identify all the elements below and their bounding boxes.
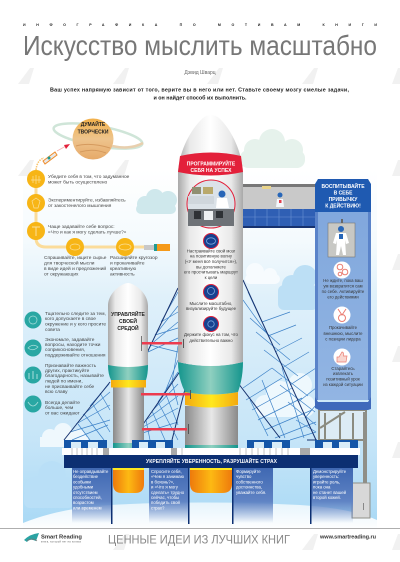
text: lesson	[323, 366, 363, 387]
red band: СЕБЯ НА УСПЕХ	[190, 168, 232, 174]
environment item 2: Экономьте, задавайте	[45, 336, 95, 343]
environment item 3: людей по имени,	[45, 378, 83, 384]
column 2: в боязнь?»,	[151, 480, 174, 484]
top caption: ИНФОГРАФИКА ПО МОТИВАМ КНИГИ	[23, 23, 377, 27]
yellow band	[185, 392, 238, 408]
heading: ПРИВЫЧКУ	[329, 197, 358, 203]
clouds	[24, 129, 318, 508]
step 5	[110, 238, 158, 278]
tower legs	[319, 410, 370, 518]
column 3: Формируйте	[236, 469, 261, 474]
step 4: Спрашивайте, ищите сырье	[44, 254, 107, 261]
environment item 3: других, практикуйте	[45, 367, 90, 374]
text: act: его действиями	[327, 294, 359, 300]
text: leader	[323, 325, 363, 342]
column 3: достоинства,	[236, 484, 262, 490]
column 4: уверенность:	[313, 474, 339, 479]
text: positive mind: к цели	[205, 275, 218, 280]
text: lesson: из каждой ситуации	[323, 382, 363, 387]
heading: СРЕДОЙ	[117, 324, 139, 332]
icon: head	[204, 284, 218, 300]
column 4: второй кожей.	[313, 495, 341, 500]
step 3: Чаще задавайте себе вопрос:	[48, 223, 115, 230]
column 1: особыми	[73, 480, 91, 484]
heading: УПРАВЛЯЙТЕ	[111, 310, 146, 318]
heading	[78, 120, 109, 136]
column 3: уважайте себя.	[236, 490, 266, 495]
environment item 2: соприкосновения,	[45, 348, 85, 353]
environment item 1: окружение и у кого просите	[45, 322, 106, 328]
nozzles	[113, 468, 232, 493]
red support arms	[141, 336, 191, 434]
icon: thumbs up	[334, 348, 350, 366]
text: positive mind: его просчитывать маршрут	[184, 270, 238, 274]
environment item 3: Признавайте важность	[45, 362, 97, 369]
footer url: www.smartreading.ru	[319, 534, 377, 540]
footer line	[0, 527, 400, 530]
step 4: от окружающих	[44, 272, 79, 278]
column 2: сейчас, чтобы	[151, 495, 179, 500]
column 2: страх?	[151, 506, 165, 510]
text: act: Не ждите, пока ваш	[323, 278, 363, 283]
environment item 2: вопросы, находите точки	[45, 343, 101, 348]
text: positive mind: вы дополняете	[196, 264, 227, 270]
step 4: в виде идей и предложений	[44, 265, 106, 272]
column 1: удобными	[73, 484, 94, 490]
environment item 2: поддерживайте отношения	[45, 352, 106, 358]
step 5: и прокачивайте	[110, 260, 145, 266]
environment item 4	[24, 396, 80, 416]
step 1	[27, 170, 130, 188]
environment item 4: от вас ожидают	[45, 412, 80, 416]
text: focus: Держите фокус на том, что	[184, 332, 239, 337]
step 2: от закостенелого мышления	[48, 204, 112, 209]
text: leader: Прокачивайте	[329, 325, 358, 330]
step 5: активность	[110, 272, 135, 278]
environment item 3: всю славу	[45, 390, 68, 395]
environment item 1	[24, 311, 106, 333]
step 2	[27, 194, 126, 212]
text: positive mind: («У меня всё получится»),	[185, 259, 237, 264]
author: Дэвид Шварц	[184, 70, 216, 76]
path: idea track	[36, 180, 146, 247]
heading: ВОСПИТЫВАЙТЕ	[321, 182, 365, 190]
right truss	[238, 280, 317, 440]
environment item 4: больше, чем	[45, 405, 73, 411]
text: leader: с позиции лидера	[325, 336, 361, 342]
column 2: и «Что я могу	[151, 484, 179, 490]
icon: brain	[204, 234, 218, 248]
logo	[24, 533, 82, 544]
text: act: ум возвратится сам	[323, 284, 363, 288]
column 3: собственного	[236, 480, 263, 484]
column 2	[149, 468, 190, 524]
heading: В СЕБЕ	[334, 190, 353, 196]
logo: Smart Reading	[41, 534, 82, 540]
small rocket	[108, 283, 148, 468]
panel: tower habit	[315, 179, 371, 410]
column 4: играйте роль,	[313, 480, 340, 484]
booster horizontal	[144, 244, 170, 251]
column 1: отсутствием	[73, 490, 98, 495]
column 4: не станет вашей	[313, 490, 347, 495]
intro text: и он найдет способ их выполнить.	[153, 94, 247, 102]
yellow band	[111, 380, 146, 388]
intro text	[50, 88, 350, 102]
column 1: способностей,	[73, 495, 102, 500]
environment item 1: Тщательно следите за тем,	[45, 311, 106, 317]
text: act	[322, 278, 365, 300]
environment item 3: благодарность, называйте	[45, 372, 104, 379]
text: focus: действительно важно	[189, 338, 233, 343]
step 1: Убедите себя в том, что задуманное	[48, 174, 130, 180]
text: lesson: позитивный урок	[326, 376, 360, 382]
icon: robot on bridge	[276, 192, 284, 207]
heading: К ДЕЙСТВИЮ!	[325, 202, 361, 210]
footer slogan: ЦЕННЫЕ ИДЕИ ИЗ ЛУЧШИХ КНИГ	[108, 532, 290, 546]
body and nose	[108, 283, 148, 367]
heading: ДУМАЙТЕ	[81, 120, 106, 128]
environment item 4: Всегда делайте	[45, 399, 80, 406]
column 1: или временем	[73, 506, 102, 510]
environment item 3: не присваивайте себе	[45, 383, 95, 390]
column 2: победить свой	[151, 500, 181, 505]
text: act: по себе. Активируйте	[322, 289, 365, 294]
launch platform	[62, 440, 360, 455]
step 2: Экспериментируйте, избавляйтесь	[48, 196, 126, 204]
step 4	[44, 238, 107, 278]
step 5: креативную	[110, 267, 136, 272]
icon: planet	[52, 118, 144, 160]
column 3: чувство	[236, 474, 252, 479]
text: positive mind: на позитивную волну	[190, 254, 233, 258]
snow ground	[23, 502, 377, 530]
step 5: Расширяйте кругозор	[110, 254, 158, 261]
icon: elevator with robot	[328, 219, 355, 257]
column 2: Спросите себя,	[151, 469, 182, 474]
banner	[64, 455, 358, 468]
icon: medal	[334, 306, 350, 324]
step 4: для творческой мысли	[44, 260, 95, 266]
intro text: Ваш успех напрямую зависит от того, верите вы в него или нет. Ставьте своему мозгу смелые задачи,	[50, 88, 350, 94]
text: positive mind: Настраивайте свой мозг	[187, 248, 236, 254]
heading	[111, 310, 146, 332]
column 2: «Чем я занимаю	[151, 474, 185, 479]
logo: книга, которой нет на полках	[41, 540, 82, 544]
column 3	[232, 468, 273, 524]
banner: УКРЕПЛЯЙТЕ УВЕРЕННОСТЬ, РАЗРУШАЙТЕ СТРАХ	[146, 457, 278, 465]
red band	[178, 152, 243, 176]
text: visualize	[186, 301, 237, 311]
icon: gears	[334, 262, 350, 278]
environment item 1: кого допускаете в свое	[45, 317, 96, 322]
column 2: сделать» трудно	[151, 490, 185, 495]
column 4: пока она	[313, 484, 331, 490]
column 1: Не оправдывайте	[73, 469, 109, 474]
red band: ПРОГРАММИРУЙТЕ	[187, 160, 236, 168]
text: leader: внешнюю, мыслите	[323, 331, 363, 336]
text: visualize: визуализируйте будущее	[186, 306, 237, 311]
text: lesson: Старайтесь	[331, 366, 355, 371]
step 1: может быть осуществлено	[48, 180, 108, 186]
column 4	[310, 468, 353, 524]
step 3	[27, 222, 127, 240]
mini rocket and arrow	[36, 144, 70, 170]
lamp	[262, 186, 271, 189]
column 1	[72, 468, 112, 524]
teal section	[178, 362, 243, 394]
background sky	[23, 170, 377, 525]
teal section	[108, 365, 148, 380]
column 1: возрастом	[73, 500, 94, 505]
body and nose	[178, 115, 243, 366]
main rocket	[178, 115, 243, 468]
column 4: Демонстрируйте	[313, 469, 347, 474]
heading	[321, 182, 365, 210]
bridge	[243, 184, 316, 228]
environment item 1: совета	[45, 328, 60, 333]
heading: ТВОРЧЕСКИ	[78, 130, 109, 136]
left truss	[64, 382, 110, 440]
lower stage	[185, 406, 238, 445]
text: focus	[184, 332, 239, 343]
step 3: «Что и как я могу сделать лучше?»	[48, 230, 127, 236]
heading: СВОЕЙ	[119, 317, 137, 325]
centre-left truss	[132, 288, 195, 440]
environment item 2	[24, 336, 106, 358]
environment item 3	[24, 362, 104, 395]
column 1: бездействие	[73, 474, 99, 479]
text: visualize: Мыслите масштабно,	[190, 301, 232, 306]
text: positive mind	[184, 248, 238, 280]
text: lesson: извлекать	[333, 371, 354, 376]
window: astronaut in cabin	[187, 180, 235, 228]
icon: target	[204, 316, 218, 332]
